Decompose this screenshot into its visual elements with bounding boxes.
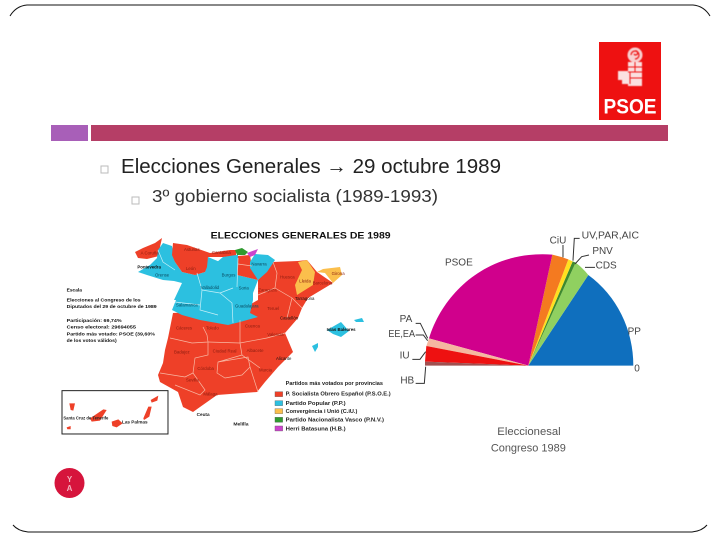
badge: YA: Y <box>67 475 73 484</box>
province labels: Teruel <box>267 306 279 311</box>
province labels <box>137 247 356 396</box>
badge: YA <box>54 468 84 498</box>
province labels: Salamanca <box>176 303 198 308</box>
province borders <box>160 262 302 395</box>
label: Ceuta: Ceuta <box>197 412 210 417</box>
map side notes: Censo electoral: 29694055 <box>67 325 136 331</box>
bullet: sub <box>132 197 139 204</box>
province labels: Barcelona <box>313 281 333 286</box>
map side notes: Participación: 69,74% <box>67 318 122 324</box>
province labels: León <box>186 266 196 271</box>
province labels: Zaragoza <box>258 288 277 293</box>
map legend: P. Socialista Obrero Español (P.S.O.E.) <box>286 392 391 398</box>
map: blue Burgos patch <box>205 255 238 275</box>
map: yellow Lleida <box>295 260 315 295</box>
subheading: third government: 3º gobierno socialista (1989-1993) <box>152 186 438 206</box>
province labels: Asturias <box>184 247 200 252</box>
province labels: Sevilla <box>186 377 199 382</box>
chart labels: HB <box>400 375 415 386</box>
chart labels: EE,EA <box>388 329 415 340</box>
province labels: Castellón <box>280 315 299 320</box>
map legend: Herri Batasuna (H.B.) <box>286 426 346 432</box>
map: red Asturias Leon Cantabria <box>172 243 236 275</box>
segment: PA and EE <box>426 338 528 366</box>
segment: UV PAR AIC <box>528 259 573 366</box>
map title: ELECCIONES GENERALES DE 1989 <box>211 231 391 241</box>
segment: CiU <box>528 255 568 366</box>
province labels: Málaga <box>203 391 218 396</box>
chart caption: Eleccionesal <box>497 426 561 438</box>
chart labels: CDS <box>596 260 617 271</box>
map: yellow Girona <box>317 267 342 283</box>
badge: YA: A <box>67 484 73 493</box>
province labels: Girona <box>332 271 345 276</box>
province labels: Burgos <box>222 273 235 278</box>
map: blue Baleares <box>312 318 364 352</box>
map side notes: Elecciones al Congreso de los <box>67 297 141 303</box>
province labels: Navarra <box>251 262 267 267</box>
map legend: Convergència i Unió (C.iU.) <box>286 409 358 415</box>
map: red mainland <box>158 260 333 412</box>
province labels: Orense <box>155 273 170 278</box>
map: green province <box>235 248 248 255</box>
segment: PSOE <box>429 254 552 366</box>
province labels: Valladolid <box>201 285 220 290</box>
map: Spain 1989 results <box>135 238 364 412</box>
province labels: Cuenca <box>245 323 260 328</box>
province labels: Pontevedra <box>137 265 161 270</box>
chart labels: CiU <box>550 235 566 246</box>
leader lines <box>412 238 595 383</box>
province labels: Córdoba <box>197 366 215 371</box>
segment: HB <box>425 362 528 366</box>
map legend: Partidos más votados por provincias <box>286 381 383 387</box>
map: blue provinces <box>138 243 258 325</box>
province labels: Islas Baleares <box>327 327 356 332</box>
map: blue Navarra <box>250 254 275 280</box>
segment: PP <box>528 275 633 366</box>
header bar: purple block <box>51 125 88 141</box>
chart labels: 0 <box>634 364 640 375</box>
icon: fist and rose <box>618 48 642 86</box>
province labels: Badajoz <box>174 349 190 354</box>
map side notes <box>67 288 157 344</box>
logo wordmark: PSOE <box>604 96 656 118</box>
province labels: Toledo <box>206 326 219 331</box>
logo: PSOE <box>599 42 661 120</box>
label: Melilla: Melilla <box>233 421 249 427</box>
map: red Alava and Rioja <box>237 255 258 280</box>
map: red Galicia north <box>135 238 162 259</box>
map side notes: Diputados del 29 de octubre de 1989 <box>67 304 157 310</box>
province labels: Huesca <box>280 275 295 280</box>
map side notes: Partido más votado: PSOE (39,60% <box>67 331 156 337</box>
province labels: Cantabria <box>212 250 231 255</box>
segment: CDS <box>528 263 588 366</box>
map side notes: de los votos válidos) <box>67 338 117 344</box>
province labels: Guadalajara <box>235 303 259 308</box>
inset: Canary Islands: Las Palmas <box>122 419 148 424</box>
chart labels: PSOE <box>445 257 473 268</box>
province labels: Alicante <box>276 356 292 361</box>
map legend: Partido Nacionalista Vasco (P.N.V.) <box>286 418 384 424</box>
province labels: A Coruña <box>141 251 159 256</box>
chart labels: UV,PAR,AIC <box>582 230 639 241</box>
province labels: Murcia <box>259 368 273 373</box>
segment: IU <box>425 346 528 366</box>
bullet: main <box>101 166 108 173</box>
chart: seats semicircle <box>388 230 641 454</box>
province labels: Ciudad Real <box>213 349 237 354</box>
province labels: Albacete <box>247 348 264 353</box>
header bar: crimson strip <box>91 125 668 141</box>
map side notes: Escala <box>67 288 82 294</box>
map legend: Partido Popular (P.P.) <box>286 401 346 407</box>
inset: Canary Islands: Santa Cruz de Tenerife <box>63 415 109 420</box>
inset: Canary Islands <box>62 391 168 434</box>
province labels: Tarragona <box>295 296 315 301</box>
segment: PNV <box>528 261 576 366</box>
chart labels: IU <box>400 350 410 361</box>
map legend <box>275 381 391 432</box>
chart labels: PP <box>628 326 641 337</box>
province labels: Lleida <box>299 278 311 283</box>
chart caption <box>491 426 566 454</box>
chart labels <box>388 230 641 386</box>
heading: election date: Elecciones Generales → 29 octubre 1989 <box>121 155 501 178</box>
chart caption: Congreso 1989 <box>491 442 566 454</box>
province labels: Cáceres <box>176 326 192 331</box>
chart labels: PNV <box>592 246 613 257</box>
province labels: Soria <box>239 285 249 290</box>
province labels: Valencia <box>267 332 284 337</box>
map: purple province <box>247 249 258 257</box>
chart labels: PA <box>400 314 413 325</box>
